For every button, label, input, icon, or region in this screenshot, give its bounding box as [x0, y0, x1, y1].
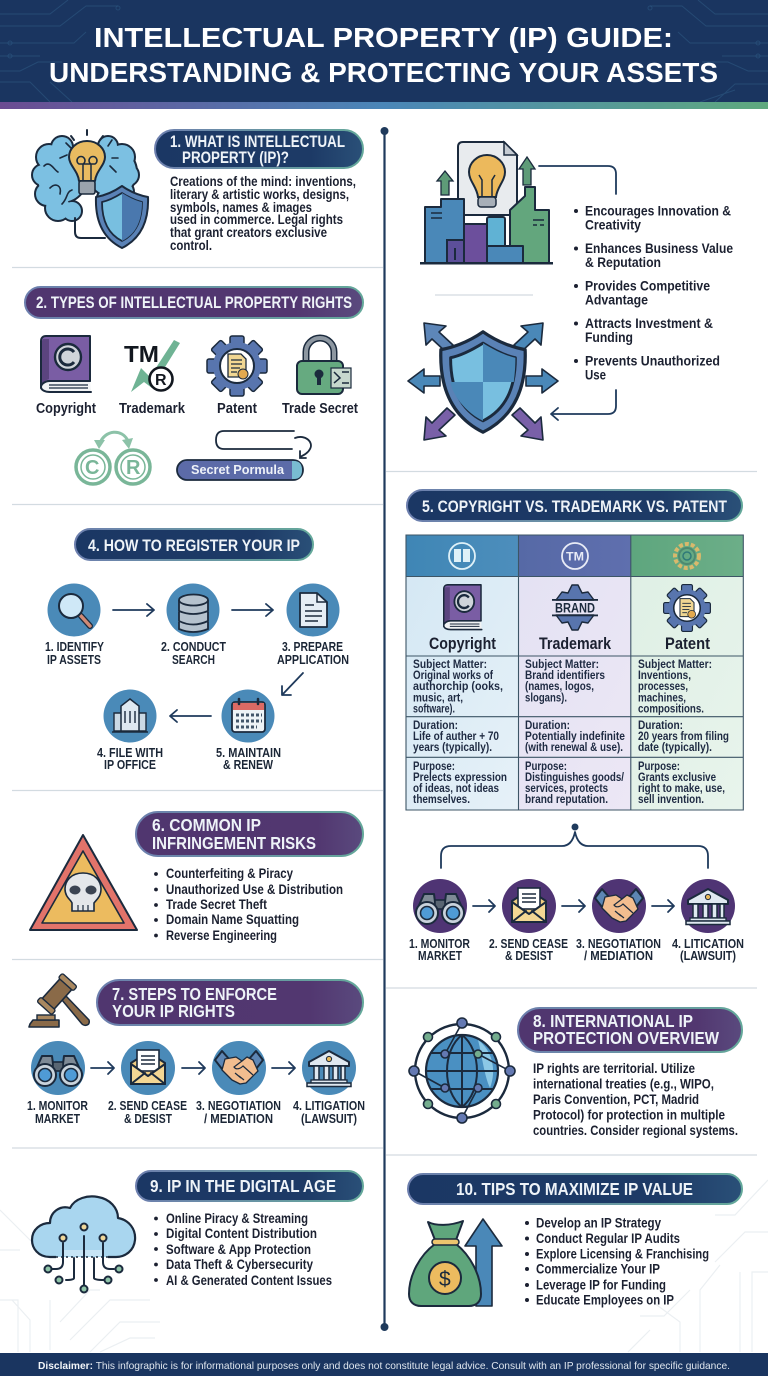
step: negotiation: / MEDIATION	[584, 949, 653, 963]
list: IP benefits: Use	[585, 368, 606, 382]
list: IP benefits: Creativity	[585, 218, 641, 232]
arrow	[562, 900, 585, 912]
icon: copyright book	[41, 336, 91, 392]
icon: shield with arrows	[408, 323, 558, 440]
list: IP benefits: Attracts Investment &	[585, 316, 713, 331]
text: patent column: Purpose:	[638, 761, 680, 773]
text: trademark column: services, protects	[525, 783, 608, 795]
list: tips: Educate Employees on IP	[536, 1292, 674, 1308]
labels: rights types: Copyright	[36, 401, 96, 417]
step: negotiation: 3. NEGOTIATION	[576, 937, 661, 951]
bracket connector	[441, 824, 708, 868]
step: file with IP office	[97, 690, 163, 772]
heading: how to register: 4. HOW TO REGISTER YOUR IP	[88, 537, 300, 555]
icon: trademark	[124, 340, 180, 392]
icon: trade secret lock	[297, 338, 351, 394]
step: litigation: 4. LITICATION	[672, 937, 744, 951]
list: infringement risks: Domain Name Squatting	[166, 912, 299, 927]
step: monitor market: 1. MONITOR	[27, 1099, 88, 1113]
icon: brand gear: BRAND	[555, 600, 595, 616]
panel: 1 what is IP	[33, 130, 363, 253]
icon: small gear badge	[675, 544, 699, 568]
text: patent column: Subject Matter:	[638, 659, 712, 671]
list: infringement risks	[154, 866, 343, 943]
text: trademark column: slogans).	[525, 692, 567, 704]
step: identify IP assets: 1. IDENTIFY	[45, 640, 105, 654]
text: copyright column: Life of auther + 70	[413, 731, 499, 743]
heading: digital age: 9. IP IN THE DIGITAL AGE	[150, 1176, 336, 1196]
panel: 9 digital age	[32, 1171, 363, 1292]
list: IP benefits	[574, 204, 733, 382]
step: send cease and desist: 2. SEND CEASE	[489, 937, 568, 951]
step: send cease and desist: & DESIST	[505, 949, 553, 963]
step: monitor market	[27, 1041, 88, 1126]
text: patent column: sell invention.	[638, 794, 704, 806]
heading: infringement risks: INFRINGEMENT RISKS	[152, 833, 316, 853]
text block: IP definition	[170, 174, 356, 253]
list: IP benefits: Encourages Innovation &	[585, 204, 731, 218]
text: copyright column: authorchip (ooks,	[413, 681, 503, 693]
text: copyright column: years (typically).	[413, 742, 492, 754]
step: maintain and renew: & RENEW	[223, 758, 273, 772]
icon: globe network	[409, 1018, 515, 1123]
list: IP benefits: Provides Competitive	[585, 278, 710, 294]
list: tips: Leverage IP for Funding	[536, 1278, 666, 1292]
header banner	[0, 0, 768, 109]
list: digital age issues: Online Piracy & Streaming	[166, 1211, 308, 1226]
step: maintain and renew: 5. MAINTAIN	[216, 746, 281, 760]
text: copyright column	[413, 659, 507, 806]
step: send cease and desist	[108, 1041, 187, 1126]
list: infringement risks: Counterfeiting & Piracy	[166, 866, 293, 881]
list: infringement risks: Trade Secret Theft	[166, 897, 267, 912]
text: patent column: 20 years from filing	[638, 731, 729, 743]
step: file with IP office: IP OFFICE	[104, 758, 156, 772]
icon: secret formula scroll	[216, 431, 311, 458]
text: patent column: machines,	[638, 692, 686, 704]
text block: IP definition: control.	[170, 238, 212, 253]
labels: rights types: Trademark	[119, 401, 186, 417]
labels: rights types	[36, 401, 358, 417]
icon: C and R circles	[76, 432, 150, 484]
list: digital age issues: Software & App Protection	[166, 1242, 311, 1257]
list: IP benefits: Enhances Business Value	[585, 241, 733, 256]
step: litigation: (LAWSUIT)	[301, 1112, 357, 1126]
step: conduct search: 2. CONDUCT	[161, 640, 226, 654]
step: prepare application	[277, 584, 349, 667]
step: litigation	[672, 879, 744, 963]
arrow	[652, 900, 674, 912]
list: IP benefits: & Reputation	[585, 255, 661, 270]
text: patent column: Duration:	[638, 720, 683, 732]
labels: rights types: Patent	[217, 401, 257, 417]
step: monitor market: MARKET	[35, 1112, 80, 1126]
list: IP benefits: Advantage	[585, 292, 648, 308]
arrow	[272, 1062, 295, 1074]
panel: 6 infringement risks	[30, 812, 363, 943]
pill: secret formula: Secret Pormula	[191, 462, 285, 477]
panel: 5 comparison	[406, 490, 744, 963]
labels: columns: Copyright	[429, 635, 496, 653]
icon: TM badge: TM	[566, 552, 584, 564]
list: infringement risks: Reverse Engineering	[166, 928, 277, 943]
comparison table	[406, 535, 743, 810]
icon: money bag with arrow: $	[439, 1268, 451, 1291]
arrow	[113, 604, 154, 616]
text: trademark column: Distinguishes goods/	[525, 772, 625, 784]
heading: infringement risks	[136, 812, 363, 856]
icon: C and R circles: C	[85, 457, 99, 479]
icon: C and R circles: R	[126, 457, 141, 479]
icon: warning skull	[30, 835, 137, 930]
heading: types of IP rights	[25, 287, 363, 318]
icon: city with idea document	[420, 142, 553, 264]
icon: brand gear	[552, 585, 598, 630]
arrow	[170, 710, 211, 722]
heading: enforce rights: 7. STEPS TO ENFORCE	[112, 984, 277, 1004]
bottom-right circuit pattern	[628, 1180, 768, 1352]
connector arrow	[551, 390, 616, 420]
disclaimer footer	[0, 1353, 768, 1376]
text: trademark column: brand reputation.	[525, 794, 608, 806]
icon: TM badge	[562, 543, 588, 569]
text: patent column: right to make, use,	[638, 783, 725, 795]
heading: international IP	[518, 1008, 742, 1052]
icon: copyright book	[444, 585, 482, 630]
text: trademark column: Duration:	[525, 720, 570, 732]
text: trademark column: (with renewal & use).	[525, 742, 623, 754]
step: negotiation: 3. NEGOTIATION	[196, 1099, 281, 1113]
heading: international IP: 8. INTERNATIONAL IP	[533, 1011, 693, 1031]
heading: infringement risks: 6. COMMON IP	[152, 815, 261, 835]
step: litigation: 4. LITIGATION	[293, 1099, 365, 1113]
text: patent column: compositions.	[638, 704, 704, 716]
step: negotiation	[576, 879, 661, 963]
arrow	[182, 1062, 205, 1074]
bottom-left circuit pattern	[0, 1210, 160, 1352]
text: trademark column	[525, 659, 625, 806]
list: IP benefits: Prevents Unauthorized	[585, 354, 720, 368]
icon: trademark: R	[155, 372, 167, 389]
list: digital age issues: Digital Content Distribution	[166, 1226, 317, 1241]
text block: IP definition: symbols, names & images	[170, 200, 312, 215]
text: trademark column: (names, logos,	[525, 681, 594, 693]
text: copyright column: Prelects expression	[413, 772, 507, 784]
arrow	[232, 604, 273, 616]
text block: treaties: Paris Convention, PCT, Madrid	[533, 1092, 699, 1107]
text block: treaties: international treaties (e.g., WIPO,	[533, 1076, 714, 1092]
step: file with IP office: 4. FILE WITH	[97, 746, 163, 760]
step: identify IP assets: IP ASSETS	[47, 653, 101, 667]
text: trademark column: Potentially indefinite	[525, 731, 625, 743]
text block: IP definition: used in commerce. Legal rights	[170, 212, 343, 227]
icon: gavel	[29, 973, 89, 1027]
text: patent column: date (typically).	[638, 742, 712, 754]
step: send cease and desist: 2. SEND CEASE	[108, 1099, 187, 1113]
step: monitor market: MARKET	[418, 949, 462, 963]
text: copyright column: themselves.	[413, 794, 470, 806]
heading: copyright vs trademark vs patent	[407, 490, 742, 521]
step: maintain and renew	[216, 690, 281, 772]
heading: enforce rights: YOUR IP RIGHTS	[112, 1001, 235, 1021]
text: copyright column: software).	[413, 704, 455, 716]
title: INTELLECTUAL PROPERTY (IP) GUIDE:	[94, 22, 673, 53]
text block: IP definition: that grant creators exclusive	[170, 225, 327, 240]
heading: what is IP	[155, 130, 363, 168]
heading: tips	[408, 1174, 742, 1204]
text: copyright column: Duration:	[413, 720, 458, 732]
pill: secret formula	[177, 460, 303, 480]
text: copyright column: music, art,	[413, 692, 463, 704]
list: digital age issues	[154, 1211, 332, 1288]
disclaimer footer: Disclaimer: This infographic is for informational purposes only and does not constitute legal advice. Consult with an IP professional for specific guidance.	[38, 1360, 730, 1372]
text: copyright column: of ideas, not ideas	[413, 783, 499, 795]
panel: 2 types of IP rights	[25, 287, 363, 484]
arrow	[91, 1062, 114, 1074]
step: litigation: (LAWSUIT)	[680, 949, 736, 963]
step: conduct search: SEARCH	[172, 653, 215, 667]
step: monitor market	[409, 879, 470, 963]
arrow	[473, 900, 495, 912]
list: tips: Commercialize Your IP	[536, 1262, 660, 1276]
icon: trademark: TM	[124, 341, 159, 367]
icon: patent gear	[664, 585, 710, 631]
connector arrow	[539, 166, 616, 194]
step: conduct search	[161, 584, 226, 667]
text: patent column: Grants exclusive	[638, 772, 716, 784]
heading: types of IP rights: 2. TYPES OF INTELLECTUAL PROPERTY RIGHTS	[36, 294, 352, 312]
list: tips: Develop an IP Strategy	[536, 1216, 661, 1230]
icon: open book badge	[449, 543, 475, 569]
list: tips	[525, 1216, 709, 1308]
step: negotiation: / MEDIATION	[204, 1112, 273, 1126]
labels: columns	[429, 635, 710, 653]
text: patent column: Inventions,	[638, 670, 691, 682]
list: IP benefits: Funding	[585, 330, 633, 345]
panel: 3 why IP matters	[408, 142, 733, 440]
list: infringement risks: Unauthorized Use & Distribution	[166, 882, 343, 897]
text block: IP definition: Creations of the mind: inventions,	[170, 174, 356, 189]
step: identify IP assets	[45, 584, 105, 667]
icon: patent gear	[207, 336, 267, 396]
icon: money bag with arrow	[409, 1219, 502, 1306]
heading: digital age	[136, 1171, 363, 1201]
text: patent column: processes,	[638, 681, 688, 693]
panel: 4 how to register	[45, 529, 349, 772]
text: trademark column: Brand identifiers	[525, 670, 605, 682]
heading: what is IP: PROPERTY (IP)?	[182, 149, 289, 167]
step: prepare application: 3. PREPARE	[282, 640, 343, 654]
heading: tips: 10. TIPS TO MAXIMIZE IP VALUE	[456, 1179, 693, 1199]
text block: treaties: Protocol) for protection in multiple	[533, 1108, 725, 1122]
text: patent column	[638, 659, 729, 806]
text: trademark column: Purpose:	[525, 761, 567, 773]
step: litigation	[293, 1041, 365, 1126]
panel: 7 steps to enforce	[27, 973, 365, 1126]
labels: columns: Trademark	[539, 635, 612, 653]
step: send cease and desist: & DESIST	[124, 1112, 172, 1126]
text: trademark column: Subject Matter:	[525, 659, 599, 671]
list: digital age issues: AI & Generated Content Issues	[166, 1273, 332, 1288]
text: copyright column: Original works of	[413, 670, 493, 682]
step: monitor market: 1. MONITOR	[409, 937, 470, 951]
heading: international IP: PROTECTION OVERVIEW	[533, 1028, 719, 1048]
panel: 8 international protection	[409, 1008, 742, 1138]
labels: columns: Patent	[665, 635, 710, 653]
title: UNDERSTANDING & PROTECTING YOUR ASSETS	[49, 57, 718, 88]
list: tips: Explore Licensing & Franchising	[536, 1246, 709, 1262]
step: send cease and desist	[489, 879, 568, 963]
center vertical timeline	[380, 127, 388, 1331]
list: digital age issues: Data Theft & Cybersecurity	[166, 1257, 313, 1272]
step: prepare application: APPLICATION	[277, 653, 349, 667]
text block: IP definition: literary & artistic works, designs,	[170, 187, 349, 202]
heading: enforce rights	[97, 980, 363, 1025]
title	[49, 22, 718, 88]
text block: treaties	[533, 1061, 738, 1138]
heading: how to register	[75, 529, 313, 560]
labels: rights types: Trade Secret	[282, 401, 358, 417]
dividers	[12, 268, 757, 1155]
icon: cloud circuit	[32, 1196, 135, 1292]
text block: treaties: IP rights are territorial. Utilize	[533, 1061, 695, 1076]
icon: brain with bulb and shield	[33, 130, 148, 248]
panel: 10 tips	[408, 1174, 742, 1308]
text: copyright column: Subject Matter:	[413, 659, 487, 671]
step: negotiation	[196, 1041, 281, 1126]
text: copyright column: Purpose:	[413, 761, 455, 773]
arrow	[282, 673, 303, 695]
list: tips: Conduct Regular IP Audits	[536, 1231, 680, 1246]
heading: what is IP: 1. WHAT IS INTELLECTUAL	[170, 133, 345, 151]
